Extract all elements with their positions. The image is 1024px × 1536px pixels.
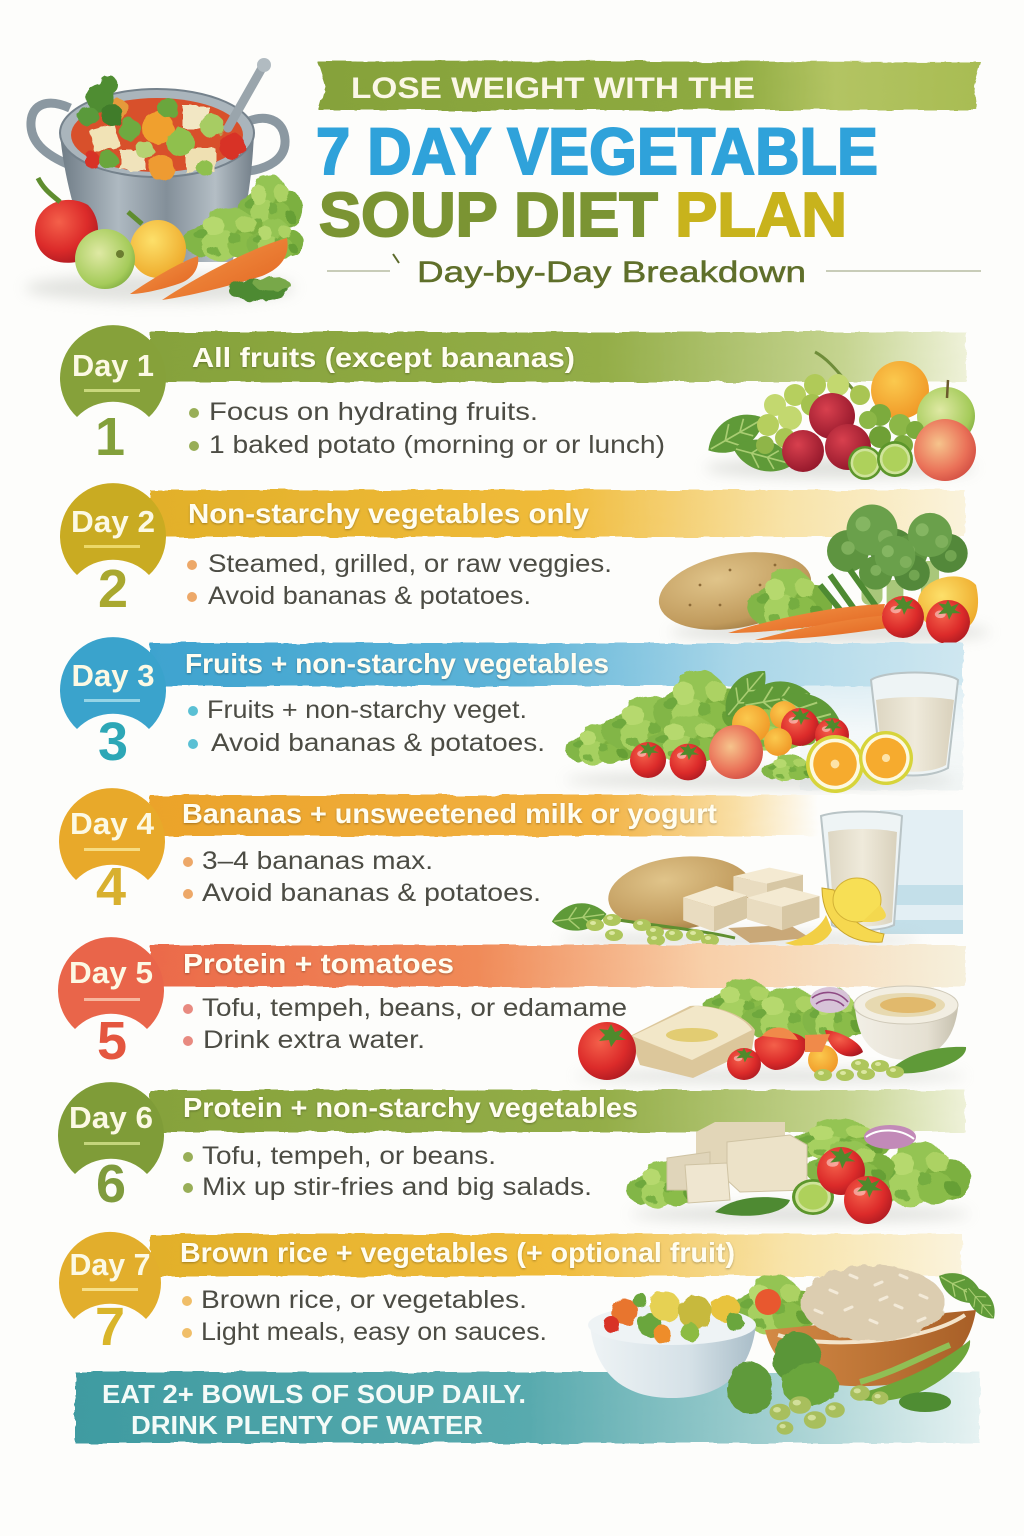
day 1 number: 1 <box>95 407 125 467</box>
day 7 bullets <box>182 1286 547 1346</box>
day 5 heading: Protein + tomatoes <box>183 948 454 979</box>
day 5 bullets: Tofu, tempeh, beans, or edamame <box>202 994 627 1022</box>
day 3 row <box>60 637 963 800</box>
day 6 badge <box>58 1082 164 1174</box>
day 7 food illustration <box>588 1264 1002 1435</box>
day 1 badge <box>60 325 166 417</box>
day 3 banner <box>150 643 963 686</box>
day 2 bullets: Avoid bananas & potatoes. <box>208 582 531 610</box>
title line 2: SOUP DIET PLAN <box>319 181 847 250</box>
day 7 number: 7 <box>95 1297 125 1357</box>
day 7 heading: Brown rice + vegetables (+ optional fruit) <box>180 1237 735 1268</box>
day 6 bullets <box>183 1142 592 1201</box>
day 4 bullets: Avoid bananas & potatoes. <box>202 879 541 907</box>
day 4 food illustration <box>550 812 920 947</box>
day 5 number: 5 <box>97 1011 127 1071</box>
header ribbon <box>317 61 981 110</box>
day 4 background wash <box>880 810 963 934</box>
day 7 row <box>59 1232 962 1357</box>
day 7 bullets: Light meals, easy on sauces. <box>201 1318 547 1346</box>
day 7 badge rule <box>82 1288 138 1291</box>
subtitle with rules <box>327 254 981 289</box>
day 6 heading: Protein + non-starchy vegetables <box>183 1092 638 1123</box>
day 2 bullets <box>187 550 612 610</box>
day 2 badge label: Day 2 <box>71 504 155 539</box>
day 5 badge label: Day 5 <box>69 955 153 990</box>
day 6 number: 6 <box>96 1154 126 1214</box>
day 6 row <box>58 1082 971 1224</box>
subtitle with rules: Day-by-Day Breakdown <box>417 256 806 289</box>
day 6 bullets: Tofu, tempeh, or beans. <box>202 1142 496 1170</box>
footer banner <box>75 1372 980 1443</box>
day 6 banner <box>150 1090 965 1132</box>
day 5 bullets: Drink extra water. <box>203 1026 425 1054</box>
day 7 banner <box>150 1234 962 1276</box>
day 4 bullets: 3–4 bananas max. <box>202 847 433 875</box>
day 2 row <box>60 483 990 644</box>
day 4 badge <box>59 788 165 880</box>
footer text: DRINK PLENTY OF WATER <box>131 1410 483 1440</box>
title line 1: 7 DAY VEGETABLE <box>316 114 878 188</box>
day 3 bullets: Fruits + non-starchy veget. <box>207 696 527 724</box>
day 1 bullets: Focus on hydrating fruits. <box>209 398 538 426</box>
day 6 food illustration <box>627 1119 971 1224</box>
day 4 badge label: Day 4 <box>70 806 155 841</box>
day 4 number: 4 <box>96 857 126 917</box>
day 4 banner <box>150 795 965 836</box>
day 3 bullets: Avoid bananas & potatoes. <box>211 729 545 757</box>
day 2 bullets: Steamed, grilled, or raw veggies. <box>208 550 612 578</box>
day 6 badge label: Day 6 <box>69 1100 153 1135</box>
day 3 background wash <box>800 652 963 790</box>
day 4 row <box>59 788 965 947</box>
day 6 badge rule <box>84 1142 140 1145</box>
footer text: EAT 2+ BOWLS OF SOUP DAILY. <box>102 1379 526 1409</box>
day 1 heading: All fruits (except bananas) <box>192 342 575 373</box>
day 2 badge <box>60 483 166 575</box>
day 2 vegetable illustration <box>653 504 990 644</box>
day 1 badge label: Day 1 <box>72 348 154 383</box>
day 3 heading: Fruits + non-starchy vegetables <box>185 648 609 679</box>
day 1 bullets: 1 baked potato (morning or or lunch) <box>209 431 665 459</box>
day 4 badge rule <box>84 848 140 851</box>
day 3 bullets <box>188 696 545 757</box>
day 3 badge label: Day 3 <box>72 658 154 693</box>
day 1 banner <box>150 332 966 382</box>
day 3 food illustration <box>565 661 958 800</box>
day 1 bullets <box>189 398 665 459</box>
day 5 row <box>58 937 966 1083</box>
day 1 row <box>60 325 976 481</box>
day 2 banner <box>150 490 965 537</box>
day 5 badge <box>58 937 164 1029</box>
day 4 heading: Bananas + unsweetened milk or yogurt <box>182 798 717 829</box>
day 2 heading: Non-starchy vegetables only <box>188 498 589 529</box>
day 5 food illustration <box>575 979 966 1083</box>
day 5 badge rule <box>84 998 140 1001</box>
day 6 bullets: Mix up stir-fries and big salads. <box>202 1173 592 1201</box>
ribbon heading: LOSE WEIGHT WITH THE <box>351 72 755 105</box>
day 5 banner <box>150 945 965 987</box>
day 7 badge <box>59 1232 161 1319</box>
day 2 number: 2 <box>98 559 128 619</box>
day 3 number: 3 <box>98 712 128 772</box>
day 3 badge <box>60 637 166 729</box>
day 1 badge rule <box>84 389 140 392</box>
day 7 badge label: Day 7 <box>70 1247 150 1282</box>
footer text <box>102 1379 526 1440</box>
day 5 bullets <box>183 994 627 1054</box>
day 1 fruit illustration <box>700 352 976 481</box>
day 7 bullets: Brown rice, or vegetables. <box>201 1286 527 1314</box>
day 3 badge rule <box>84 699 140 702</box>
day 4 bullets <box>183 847 541 907</box>
icon: soup pot with vegetables <box>25 58 304 302</box>
day 2 badge rule <box>84 545 140 548</box>
